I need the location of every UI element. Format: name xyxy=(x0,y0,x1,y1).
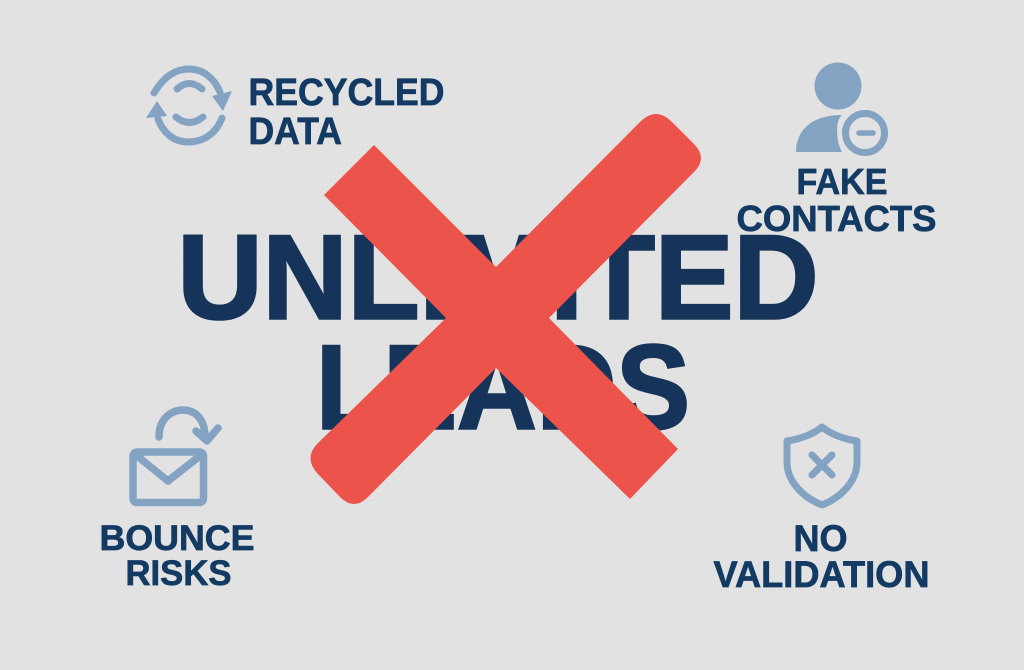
title: unlimited leads: LEADS xyxy=(316,321,690,455)
item: bounce risks xyxy=(100,410,255,593)
title: unlimited leads xyxy=(178,211,818,455)
label: recycled data: DATA xyxy=(248,111,342,153)
title: unlimited leads: UNLIMITED xyxy=(178,211,818,345)
item: recycled data xyxy=(146,69,444,153)
label: no validation: NO xyxy=(794,518,848,559)
label: fake contacts: FAKE xyxy=(796,161,888,202)
label: no validation: VALIDATION xyxy=(714,554,930,595)
label: fake contacts xyxy=(736,161,936,239)
item: no validation xyxy=(714,427,930,595)
icon: person with minus badge xyxy=(796,62,884,152)
label: no validation xyxy=(714,518,930,595)
label: recycled data xyxy=(248,72,444,153)
label: recycled data: RECYCLED xyxy=(248,72,444,114)
icon: recycle arrows xyxy=(146,69,232,142)
item: fake contacts xyxy=(736,62,936,239)
red cross-out mark xyxy=(310,114,701,504)
label: bounce risks xyxy=(100,519,255,593)
label: fake contacts: CONTACTS xyxy=(736,198,936,239)
icon: shield with x xyxy=(787,427,857,505)
label: bounce risks: BOUNCE xyxy=(100,519,255,558)
label: bounce risks: RISKS xyxy=(126,554,232,593)
icon: envelope with return arrow xyxy=(133,410,218,502)
